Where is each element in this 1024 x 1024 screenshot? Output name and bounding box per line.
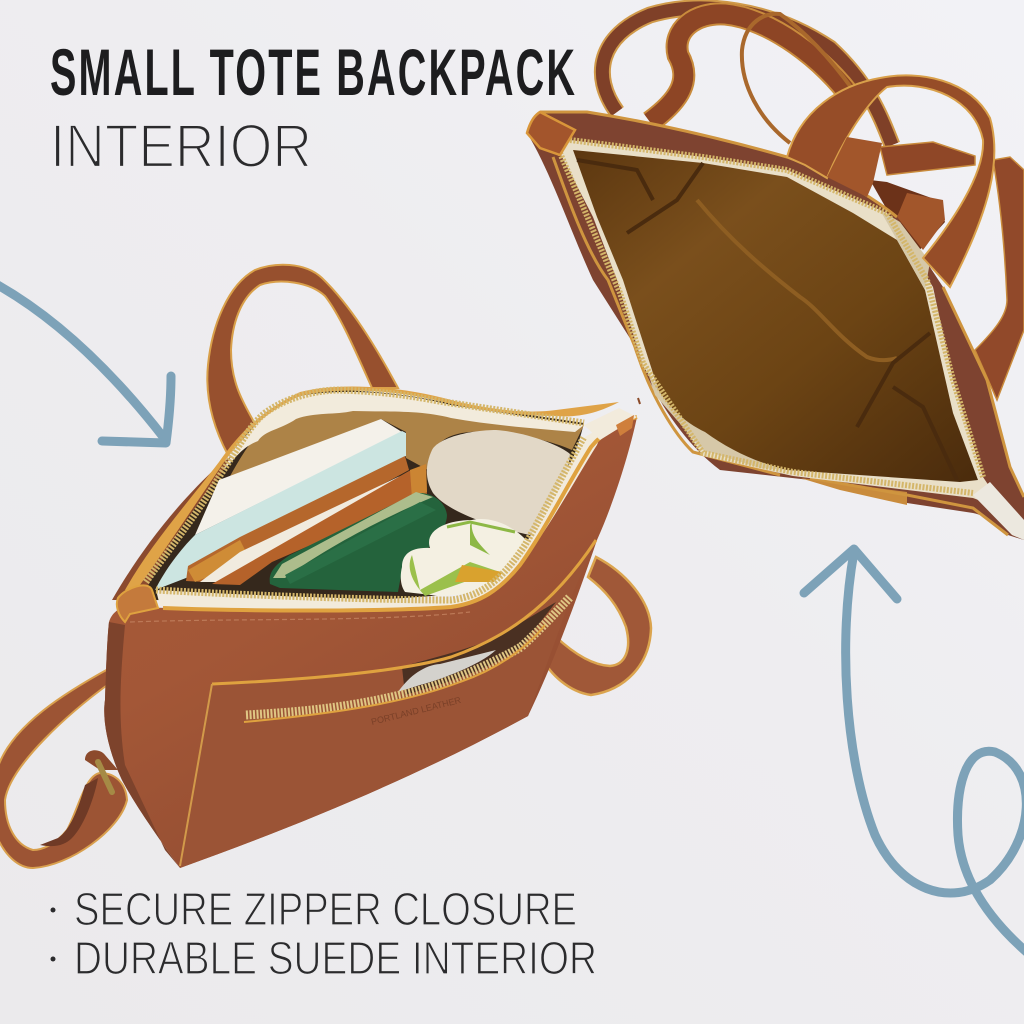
outer body [527, 112, 1024, 540]
zipper end tab [117, 585, 158, 622]
top corner tab [527, 112, 575, 155]
arrow: pointing to left bag [0, 284, 171, 443]
arrow: pointing to right bag [804, 549, 1024, 955]
front zipper tape [156, 425, 605, 610]
notebook [155, 419, 406, 590]
thin strap loop [742, 14, 853, 143]
back rim [125, 386, 619, 592]
stray stitch [638, 398, 640, 404]
feature list [50, 883, 597, 984]
cross strap [880, 142, 975, 175]
back panel outer [112, 450, 240, 600]
lining wave [223, 392, 584, 470]
front stitching [130, 612, 470, 622]
pocket flap beneath [800, 478, 907, 505]
interior pocket seam [697, 200, 897, 360]
top handle [787, 75, 994, 287]
fold shadow [40, 778, 98, 846]
green wallet [270, 492, 447, 592]
top zipper pull [584, 408, 637, 440]
body edge binding [163, 417, 637, 610]
interior tabs [577, 160, 957, 480]
title: INTERIOR [50, 112, 312, 180]
zipper pull [973, 482, 1024, 540]
back strap left [0, 668, 127, 868]
floral pouch [401, 519, 532, 596]
lining patches [645, 210, 930, 470]
feature list: DURABLE SUEDE INTERIOR [74, 932, 597, 984]
back strap right [542, 557, 651, 695]
corner tab [616, 415, 634, 436]
interior dark base [146, 390, 584, 602]
rim binding [540, 112, 1024, 535]
rear strap two [650, 14, 853, 122]
left bag [0, 265, 651, 868]
side panel shade [104, 622, 180, 868]
zipper teeth [560, 140, 983, 493]
ring buckle [85, 750, 118, 792]
pocket: PORTLAND LEATHER [370, 695, 462, 727]
suede interior [573, 150, 978, 482]
front body [104, 417, 637, 868]
front zipper teeth [156, 437, 584, 600]
pocket [180, 540, 596, 868]
cream pouch [427, 430, 570, 535]
strap buckle tab [827, 137, 882, 197]
right bag [527, 8, 1024, 540]
orange wallets [186, 456, 427, 585]
zipper tape [560, 140, 1005, 510]
feature list: SECURE ZIPPER CLOSURE [74, 883, 577, 935]
top handle [207, 265, 398, 455]
dark strap under tabs [870, 180, 945, 255]
zipper back [146, 390, 584, 582]
far right strap [975, 157, 1024, 400]
interior suede [221, 395, 584, 494]
second strap tab [897, 193, 945, 250]
title [50, 36, 575, 180]
title: SMALL TOTE BACKPACK [50, 36, 575, 110]
rear strap one [602, 8, 892, 145]
